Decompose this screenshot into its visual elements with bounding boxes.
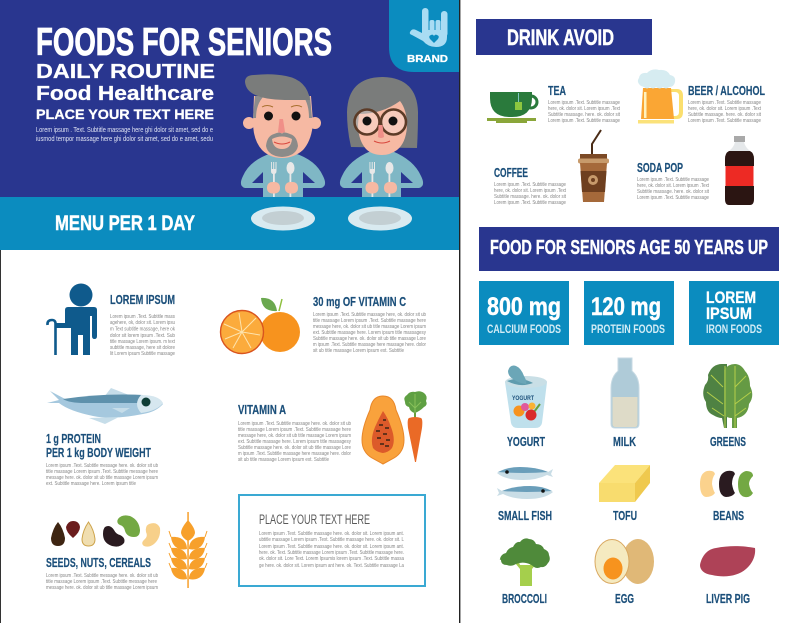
food item: small fish: [497, 467, 553, 523]
heading: 30 mg OF VITAMIN C: [313, 294, 406, 309]
illustration: grandfather: [241, 74, 325, 197]
stat card: iron: IPSUM: [706, 305, 752, 323]
body text: [494, 182, 566, 206]
heading bar: food for seniors age 50: [479, 227, 779, 271]
body text: Lorem ipsum .Text. Subtitle massage here. ok. dolor sit ub: [238, 421, 351, 427]
body text: Subtitle massage. here. ok. dolor sit: [494, 194, 566, 200]
body text: here, ok. dolor sit. Lorem ipsum .Text: [494, 188, 566, 194]
icon: beer mug: [638, 69, 683, 124]
body text: here, ok. dolor sit. Lorem ipsum .Text: [548, 106, 620, 112]
icon: senior with cane: [47, 284, 97, 355]
heading bar: drink avoid: DRINK AVOID: [507, 25, 614, 50]
heading: SODA POP: [637, 160, 683, 175]
heading: [46, 431, 151, 460]
body text: dolor sit lorem ipsum .Text. Sub: [110, 333, 175, 339]
body text: sit ub title massage Lorem ipsum ext. Subtitle: [313, 348, 404, 354]
panel: seeds, nuts, cereals: [46, 512, 207, 591]
icon: oranges: [220, 298, 300, 354]
icon: coffee cup: [578, 130, 609, 202]
heading: 1 g PROTEIN: [46, 431, 101, 446]
body text: Lorem ipsum .Text. Subtitle mass: [110, 314, 175, 320]
body text: Subtitle massage. here. ok. dolor sit: [548, 112, 620, 118]
food item: egg: [595, 539, 654, 606]
body text: [688, 100, 761, 124]
panel: vitamin c: [220, 294, 426, 354]
body text: Lorem ipsum .Text. Subtitle massage here, ok. dolor sit ub: [313, 312, 426, 318]
callout body text: here. ok. Text. Subtitle massage Lorem ipsum .Text. Subtitle massage here.: [259, 550, 404, 556]
stat card: protein: [584, 281, 674, 345]
food item: broccoli: [500, 538, 550, 606]
body text: title massage Lorem ipsum .Text. Subtitle massage here: [238, 427, 351, 433]
panel: soda pop: [637, 136, 754, 205]
body text: [110, 314, 175, 357]
icon: fish: [47, 388, 163, 424]
header body text: [36, 127, 213, 143]
illustration: plates: [251, 206, 412, 230]
body text: Lorem ipsum .Text. Subtitle massage: [688, 118, 761, 124]
body text: ext. Subtitle massage here. Lorem ipsum title massagesy: [313, 330, 426, 336]
food item: liver: [700, 546, 755, 606]
body text: Lorem ipsum .Text. Subtitle massage: [494, 200, 566, 206]
body text: here, ok. dolor sit. Lorem ipsum .Text: [637, 183, 709, 189]
food item: beans: [700, 471, 753, 523]
stat card: calcium: 800 mg: [487, 293, 561, 321]
heading: VITAMIN A: [238, 402, 286, 417]
icon: tea cup: [487, 92, 537, 123]
stat card: protein: 120 mg: [591, 293, 661, 321]
body text: message here, ok. dolor sit ub title massage Lorem ipsum: [313, 324, 426, 330]
body text: ext. Subtitle massage here. Lorem ipsum title massagesy: [238, 439, 351, 445]
body text: sit ub title massage Lorem ipsum ext. Subtitle: [238, 457, 329, 463]
callout body text: ubtitle massage Lorem ipsum .Text. Subtitle massage here. ok. dolor sit. L: [259, 537, 404, 543]
icon: seeds and beans: [51, 515, 160, 547]
brand label: BRAND: [407, 53, 448, 65]
subtitle: daily routine: DAILY ROUTINE: [36, 60, 215, 83]
label: TOFU: [613, 508, 637, 523]
heading: TEA: [548, 83, 566, 98]
callout body text: ok. dolor sit. Lore Text. Lorem Ipsumis lorem ipsum .Text. Subtitle massa: [259, 556, 405, 562]
stat card: calcium: CALCIUM FOODS: [487, 322, 561, 336]
subtitle: place your text: PLACE YOUR TEXT HERE: [36, 106, 214, 122]
body text: Subtitle massage. here. ok. dolor sit: [637, 189, 709, 195]
heading: SEEDS, NUTS, CEREALS: [46, 555, 151, 570]
menu label: MENU PER 1 DAY: [55, 211, 195, 235]
body text: Subtitle massage. here. ok. dolor sit: [688, 112, 761, 118]
body text: ext. Subtitle massage here. Lorem ipsum title: [46, 481, 136, 487]
heading: COFFEE: [494, 165, 528, 180]
label: SMALL FISH: [498, 508, 552, 523]
panel: tea: [487, 83, 620, 124]
body text: message here, ok. dolor sit ub title massage Lorem ipsum: [238, 433, 351, 439]
panel: lorem ipsum: [47, 284, 175, 357]
body text: Lorem ipsum .Text. Subtitle massage: [548, 100, 620, 106]
panel: header banner: [0, 0, 459, 250]
body text: message here. ok. dolor sit ub title massage Lorem ipsum: [46, 585, 158, 591]
body text: Lorem ipsum .Text. Subtitle message here. ok. dolor sit ub: [46, 573, 158, 579]
body text: subtitle massage, here sit dolore: [110, 345, 175, 351]
food item: milk: [611, 358, 639, 449]
icon: hand: [410, 8, 448, 47]
label: YOGURT: [507, 434, 545, 449]
body text: title massage Lorem ipsum .Text. Subtitle message here: [46, 469, 158, 475]
stat card: calcium: [479, 281, 569, 345]
stat card: protein: PROTEIN FOODS: [591, 322, 665, 336]
food item: yogurt: YOGURT: [512, 395, 534, 402]
body text: title massage Lorem ipsum. m text: [110, 339, 175, 345]
body text: Lorem ipsum .Text. Subtitle massage: [637, 177, 709, 183]
callout box: [239, 495, 425, 586]
heading: BEER / ALCOHOL: [688, 83, 765, 98]
body text: Subtitle massage here. ok. dolor sit ub title massage Lore: [238, 445, 351, 451]
callout heading: PLACE YOUR TEXT HERE: [259, 512, 370, 527]
label: LIVER PIG: [706, 591, 750, 606]
stat card: iron: IRON FOODS: [706, 322, 762, 336]
heading: PER 1 kg BODY WEIGHT: [46, 445, 151, 460]
header body text: iusmod tempor massage here ghi dolor sit amet, sed do e amet, sedu: [36, 136, 213, 143]
body text: Lorem ipsum .Text. Subtitle massage: [494, 182, 566, 188]
label: MILK: [613, 434, 636, 449]
body text: Subtitle massage here. ok. dolor sit ub title massage Lore: [313, 336, 426, 342]
title: FOODS FOR SENIORS: [36, 21, 332, 64]
panel: vitamin a: [238, 391, 427, 464]
body text: [637, 177, 709, 201]
body text: here, ok. dolor sit. Lorem ipsum .Text: [688, 106, 761, 112]
body text: Lorem ipsum .Text. Subtitle message here. ok. dolor sit ub: [46, 463, 158, 469]
icon: carrot: [404, 391, 427, 462]
panel: coffee: [494, 130, 609, 206]
body text: message here. ok. dolor sit ub title massage Lorem ipsum: [46, 475, 158, 481]
panel: beer: [638, 69, 765, 124]
subtitle: food healthcare: Food Healthcare: [36, 82, 214, 105]
heading bar: drink avoid: [476, 19, 652, 55]
callout body text: ge here. ok. dolor sit. Lorem ipsum ant here. ok. Text. Subtitle massage La: [259, 563, 405, 569]
body text: agehere, ok, dolor sit. Lorem ipsu: [110, 320, 175, 326]
food item: tofu: [599, 465, 650, 523]
body text: Lorem ipsum .Text. Subtitle massage: [548, 118, 620, 124]
body text: [46, 463, 158, 487]
body text: [313, 312, 426, 354]
body text: Lorem ipsum .Text. Subtitle massage: [688, 100, 761, 106]
food item: greens: [703, 364, 752, 449]
label: BEANS: [713, 508, 744, 523]
icon: wheat: [169, 512, 207, 588]
body text: m Text subtitle massage, here ok: [110, 326, 175, 332]
label: GREENS: [710, 434, 746, 449]
stat card: iron: [689, 281, 779, 345]
body text: [548, 100, 620, 124]
body text: m ipsum .Text. Subtitle massage here massage here. dolor: [313, 342, 426, 348]
food item: yogurt: [505, 366, 547, 449]
body text: [46, 573, 158, 591]
icon: papaya: [362, 396, 404, 464]
label: BROCCOLI: [502, 591, 547, 606]
body text: [238, 421, 351, 463]
illustration: grandmother: [340, 77, 423, 197]
body text: lit Lorem ipsum Subtitle massage: [110, 351, 175, 357]
panel: protein: [46, 388, 163, 487]
label: EGG: [615, 591, 634, 606]
callout body text: Lorem ipsum .Text. Subtitle massage here. ok. dolor sit. Lorem ipsum ant.: [259, 531, 404, 537]
body text: title massage Lorem ipsum .Text. Subtitle massage here: [313, 318, 426, 324]
header body text: Lorem ipsum . Text. Subtitle massage here ghi dolor sit amet, sed do e: [36, 127, 213, 134]
icon: soda bottle: [725, 136, 754, 205]
body text: m ipsum .Text. Subtitle massage here massage here. dolor: [238, 451, 351, 457]
callout body text: [259, 531, 405, 569]
brand badge: [389, 0, 459, 72]
heading: LOREM IPSUM: [110, 292, 175, 307]
body text: Lorem ipsum .Text. Subtitle massage: [637, 195, 709, 201]
callout body text: Lorem ipsum .Text. Subtitle massage here. ok. dolor sit. Lorem ipsum ant.: [259, 544, 404, 550]
stat card: iron: LOREM: [706, 289, 756, 307]
body text: title massage Lorem ipsum .Text. Subtitle message here: [46, 579, 157, 585]
